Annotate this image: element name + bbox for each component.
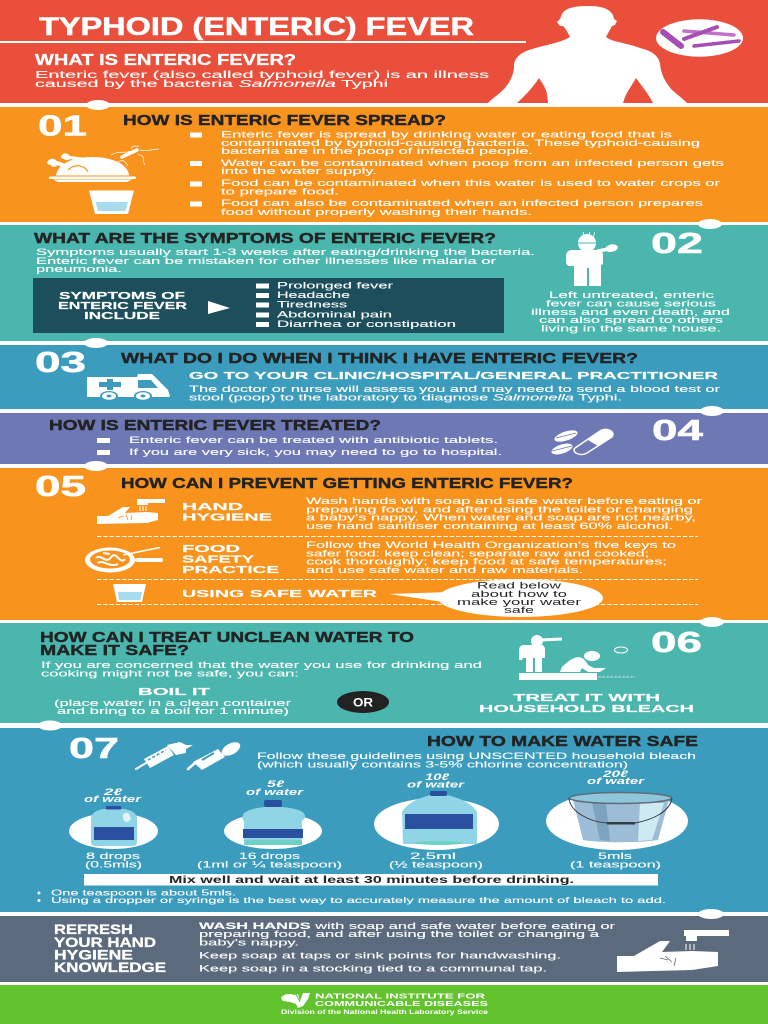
callout: symptoms list box: Tiredness [277,300,348,310]
text: food safety: Follow the World Health Organization's five keys to [306,540,676,550]
bullet list: spread: Enteric fever is spread by drinking water or eating food that is [221,130,673,140]
text: hand hygiene: preparing food, and after using the toilet or changing [306,504,693,514]
callout: symptoms list box: Diarrhea or constipation [277,319,456,329]
title: TYPHOID (ENTERIC) FEVER [39,13,474,41]
callout: mix well: Mix well and wait at least 30 minutes before drinking. [169,875,574,886]
measure: 5 litres: of water [246,787,305,798]
text: definition [35,70,489,90]
measure: 20 litres: 5mls [598,851,633,861]
option: boil it [54,686,291,716]
panel: what to do [0,345,768,409]
icon: hand washing [97,499,165,524]
text: wash hands: preparing food, and after using the toilet or changing a [199,929,599,939]
badge: or: OR [353,696,373,710]
label: hand hygiene: HYGIENE [182,512,272,524]
callout: symptoms list box: INCLUDE [84,311,161,322]
callout: read below: make your water [457,597,581,608]
heading: spread: HOW IS ENTERIC FEVER SPREAD? [123,112,446,129]
callout: symptoms list box: Abdominal pain [277,310,392,320]
text: wash hands: Keep soap in a stocking tied to a communal tap. [199,964,547,974]
icon: pills [550,428,613,457]
callout: read below [389,579,603,617]
text: concern intro: If you are concerned that the water you use for drinking and [41,660,482,670]
measure: 10 litres: 10ℓ [425,772,449,783]
measure: 10 litres: (½ teaspoon) [389,860,483,870]
heading: symptoms: WHAT ARE THE SYMPTOMS OF ENTERIC FEVER? [34,230,496,247]
text: wash hands: WASH HANDS with soap and safe water before eating or [199,921,615,931]
callout: symptoms list box: SYMPTOMS OF [59,291,185,302]
number 06: 06 [651,627,702,659]
option: treat with bleach: TREAT IT WITH [513,692,660,704]
callout: read below: Read below [477,580,561,592]
measure: 5 litres [197,779,342,870]
icon: food plate [85,548,163,572]
measure: 2 litres: of water [84,794,143,805]
text: symptoms intro [36,247,535,274]
heading: treat unclean water: HOW CAN I TREAT UNCLEAN WATER TO [40,629,414,646]
text: doctor advice [189,384,720,402]
notes: One teaspoon is about 5mls. [51,888,236,898]
bullet list: spread: Food can be contaminated when this water is used to water crops or [221,178,720,188]
option: treat with bleach: HOUSEHOLD BLEACH [479,703,694,715]
heading: what is enteric fever: WHAT IS ENTERIC FEVER? [35,52,296,69]
notes [38,888,666,905]
callout: symptoms list box: Prolonged fever [277,280,393,290]
icon: hand under tap [617,930,729,972]
panel: how is enteric fever spread [0,107,768,222]
heading: refresh: HYGIENE [54,948,133,962]
heading: refresh: YOUR HAND [54,935,156,950]
icon: human silhouette [488,6,687,103]
measure: 20 litres [546,769,688,870]
icon: roast chicken [47,146,159,182]
text: institute name: NATIONAL INSTITUTE FOR [315,992,486,1000]
measure: 5 litres: 16 drops [239,851,301,861]
bullet list: spread: to prepare food. [221,186,339,196]
text: wash hands [199,921,615,974]
text: left untreated: living in the same house. [541,324,721,334]
option: treat with bleach [479,692,694,715]
text: doctor advice: stool (poop) to the laboratory to diagnose Salmonella Typhi. [189,392,622,402]
bullet list: spread [190,130,725,217]
measure: 20 litres: (1 teaspoon) [570,860,661,870]
label: food safety practice [182,543,279,576]
callout: mix well [84,874,658,886]
bullet list: spread: Food can also be contaminated when an infected person prepares [221,198,704,208]
label: food safety practice: PRACTICE [182,564,279,576]
heading: prevention: HOW CAN I PREVENT GETTING ENTERIC FEVER? [121,475,573,492]
bullet list: spread: into the water supply. [221,166,377,176]
text: left untreated: fever can cause serious [546,298,717,308]
heading: refresh [54,922,166,975]
measure: 20 litres: of water [587,776,646,787]
text: hand hygiene: use hand sanitiser containing at least 60% alcohol. [306,521,673,531]
callout: symptoms list box [33,278,504,333]
heading: treat unclean water [40,629,414,659]
label: food safety practice: FOOD [182,543,241,555]
text: food safety: and use safe water and raw materials. [306,565,583,575]
text: guidelines: (which usually contains 3-5% chlorine concentration) [257,760,628,770]
text: definition: caused by the bacteria Salmonella Typhi [35,79,388,90]
panel: treatment [0,413,768,464]
measure: 10 litres: of water [407,780,466,790]
panel: footer [0,985,768,1024]
panel: how to make water safe [0,728,768,912]
text: symptoms intro: Enteric fever can be mistaken for other illnesses like malaria or [36,256,496,266]
bullet list: spread: food without properly washing their hands. [221,207,532,217]
text: food safety [306,540,676,575]
text: concern intro [41,660,482,678]
measure: 2 litres: 8 drops [86,851,141,861]
text: institute name: Division of the National Health Laboratory Service [281,1010,489,1016]
text: guidelines: Follow these guidelines using UNSCENTED household bleach [257,751,696,761]
text: institute name: COMMUNICABLE DISEASES [315,999,488,1008]
connector dots [38,100,724,919]
number 07: 07 [69,733,119,765]
text: food safety: cook thoroughly; keep food at safe temperatures; [306,556,667,566]
text: definition: Enteric fever (also called typhoid fever) is an illness [35,70,489,81]
callout: symptoms list box: Headache [277,290,350,300]
icon: glass of water [113,584,146,602]
panel: prevention [0,468,768,620]
measure: 2 litres [69,787,158,870]
bullet list: treatment: If you are very sick, you may need to go to hospital. [129,447,502,457]
measure: 2 litres: 2ℓ [102,787,122,798]
option: boil it: (place water in a clean container [54,698,291,708]
icon: sick person [566,232,618,286]
number 05: 05 [35,471,86,503]
measure: 10 litres: 2,5ml [410,851,456,861]
icon: people collecting water [519,635,635,680]
number 01: 01 [38,110,87,142]
text: symptoms intro: Symptoms usually start 1-3 weeks after eating/drinking the bacteria. [36,247,535,257]
panel: treat unclean water [0,623,768,723]
icon: dropper [188,739,242,770]
heading: refresh: KNOWLEDGE [54,960,166,975]
label: using safe water: USING SAFE WATER [182,588,378,600]
number 02: 02 [651,228,703,260]
heading: treatment: HOW IS ENTERIC FEVER TREATED? [49,417,381,434]
icon: syringe [136,742,193,769]
measure: 5 litres: 5ℓ [267,779,284,790]
bullet list: treatment: Enteric fever can be treated with antibiotic tablets. [129,435,498,445]
panel: symptoms [0,225,768,341]
text: left untreated: can also spread to others [539,315,724,325]
text: hand hygiene: Wash hands with soap and safe water before eating or [306,496,702,506]
heading: what to do: WHAT DO I DO WHEN I THINK I HAVE ENTERIC FEVER? [121,350,638,367]
text: symptoms intro: pneumonia. [36,264,122,274]
panel: what is enteric fever [0,0,768,103]
bullet list: spread: Water can be contaminated when poop from an infected person gets [221,158,725,168]
bullet list: spread: contaminated by typhoid-causing bacteria. These typhoid-causing [221,138,700,148]
icon: glass of water [89,190,134,214]
text: institute name [281,992,489,1016]
callout: symptoms list box: ENTERIC FEVER [58,301,188,312]
measure: 5 litres: (1ml or ¼ teaspoon) [197,860,342,870]
callout: read below: safe [504,605,534,616]
icon: bacteria [656,19,743,57]
panel: refresh hand hygiene [0,916,768,982]
text: hand hygiene: a baby's nappy. When water and soap are not nearby, [306,512,696,522]
text: wash hands: baby's nappy. [199,938,299,948]
bullet list: spread: bacteria are in the poop of infected people. [221,146,533,156]
text: guidelines [257,751,696,770]
text: left untreated: illness and even death, and [531,307,730,317]
label: food safety practice: SAFETY [182,554,254,566]
badge: or [337,691,389,713]
text: doctor advice: The doctor or nurse will assess you and may need to send a blood test or [189,384,720,394]
number 04: 04 [652,415,703,447]
option: boil it: and bring to a boil for 1 minute) [57,706,289,716]
text: hand hygiene [306,496,702,531]
notes: Using a dropper or syringe is the best way to accurately measure the amount of bleach to add. [51,895,666,905]
label: hand hygiene: HAND [182,501,244,513]
label: hand hygiene [182,501,272,524]
text: left untreated: Left untreated, enteric [549,290,715,300]
measure: 10 litres [374,772,499,870]
callout: read below: about how to [471,589,567,600]
heading: treat unclean water: MAKE IT SAFE? [40,642,189,659]
heading: refresh: REFRESH [54,922,133,937]
number 03: 03 [35,347,86,379]
bullet list: treatment [97,435,502,457]
text: left untreated [531,290,730,334]
measure: 2 litres: (0.5mls) [85,860,142,870]
text: food safety: safer food: keep clean; separate raw and cooked; [306,548,649,558]
option: boil it: BOIL IT [138,686,211,698]
subheading: go to clinic: GO TO YOUR CLINIC/HOSPITAL/GENERAL PRACTITIONER [189,370,719,382]
text: concern intro: cooking might not be safe, you can: [41,668,299,678]
heading: water safe: HOW TO MAKE WATER SAFE [427,733,698,750]
icon: ambulance [87,374,170,401]
icon: NICD logo [281,993,310,1008]
measure: 20 litres: 20ℓ [601,769,628,780]
text: wash hands: Keep soap at taps or sink points for handwashing. [199,950,561,960]
